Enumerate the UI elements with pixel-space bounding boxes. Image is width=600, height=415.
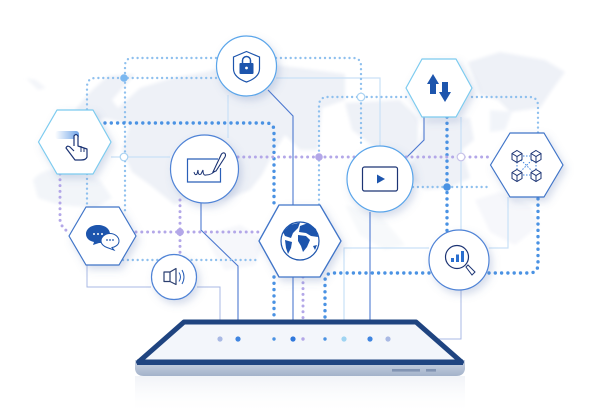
world map background xyxy=(26,52,565,270)
icon: up and down arrows hexagon xyxy=(406,59,472,117)
tablet buttons xyxy=(392,369,420,372)
icon: security shield xyxy=(216,36,276,96)
solid grey-blue lines xyxy=(87,265,461,339)
connection end dots on tablet xyxy=(217,336,391,342)
connector lines xyxy=(60,58,538,339)
tablet screen xyxy=(138,322,462,362)
tablet reflection xyxy=(135,376,465,414)
icon: touch hand hexagon xyxy=(38,110,111,174)
tablet xyxy=(135,322,465,376)
network nodes xyxy=(120,74,465,236)
icon: blockchain cubes hexagon xyxy=(490,133,563,197)
icon: data search circle xyxy=(429,230,489,290)
icon: signature circle xyxy=(170,135,238,203)
tablet body xyxy=(135,360,465,376)
icon: globe hexagon xyxy=(259,205,341,277)
solid light lines xyxy=(111,78,508,339)
icon: speaker circle xyxy=(152,254,196,300)
purple dotted lines xyxy=(60,157,490,339)
light blue dotted lines xyxy=(87,58,538,260)
icon: video player circle xyxy=(347,146,413,212)
solid blue lines xyxy=(201,90,424,339)
icon: chat bubbles hexagon xyxy=(69,207,136,265)
heavy blue dotted lines xyxy=(105,117,538,339)
